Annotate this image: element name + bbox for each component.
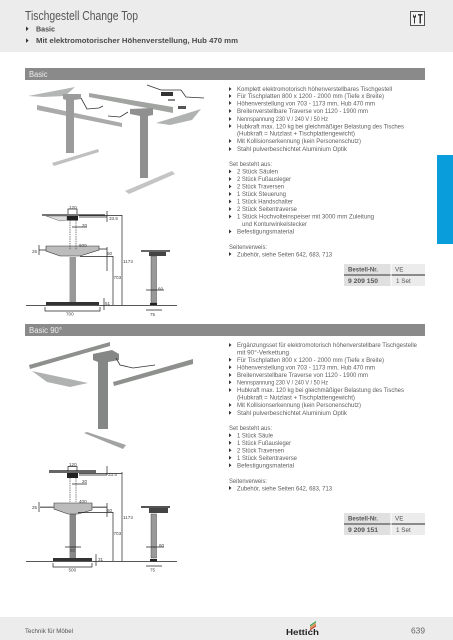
text block: Basic 90° set contents: 1 Stück Säule: [237, 432, 274, 440]
section bar: Basic: Basic: [29, 70, 48, 79]
logo: Hettich: [286, 621, 319, 637]
text block: Basic 90° features: [229, 342, 418, 417]
text block: Basic features: Breitenverstellbare Traverse von 1120 - 1900 mm: [237, 108, 368, 115]
text block: Basic features: Komplett elektromotorisch höhenverstellbares Tischgestell: [237, 86, 392, 93]
order table: Basic 90°: [344, 513, 425, 535]
technical drawing: Basic: 600: [79, 243, 87, 248]
side tab: [437, 155, 453, 244]
footer band: [0, 617, 453, 640]
text block: Basic 90° features: Für Tischplatten 800 x 1200 - 2000 mm (Tiefe x Breite): [237, 357, 384, 364]
section bar: Basic 90°: [25, 324, 425, 336]
text block: Basic 90° features: Höhenverstellung von 703 - 1173 mm, Hub 470 mm: [237, 364, 375, 372]
technical drawing: Basic 90°: 500: [68, 568, 77, 572]
text block: Basic features: Nennspannung 230 V / 240 V / 50 Hz: [237, 116, 328, 123]
technical drawing: Basic: 25: [32, 249, 38, 254]
technical drawing: Basic 90°: 75: [150, 568, 156, 572]
order table: Basic 90°: 9 209 151: [348, 527, 379, 534]
technical drawing: Basic 90°: 120: [69, 462, 77, 467]
text block: Basic set contents: 2 Stück Fußausleger: [237, 176, 291, 183]
page number: 639: [411, 626, 426, 636]
technical drawing: Basic 90°: 33.5: [108, 472, 117, 477]
text block: Basic features: (Hubkraft = Nutzlast + Tischplattengewicht): [237, 130, 355, 138]
text block: Basic 90° set contents: Befestigungsmaterial: [237, 462, 294, 470]
technical drawing: Basic 90°: 1173: [123, 515, 133, 520]
technical drawing: Basic: 20: [82, 223, 88, 228]
order table: Basic 90°: 1 Set: [396, 527, 411, 534]
technical drawing: Basic: 60: [158, 286, 164, 292]
technical drawing: Basic 90°: 400: [79, 499, 87, 504]
text block: Basic 90° cross reference: [229, 478, 333, 492]
text block: Basic 90° cross reference: Seitenverweis:: [229, 478, 267, 485]
text block: Basic set contents: 1 Stück Hochvolteinspeiser mit 3000 mm Zuleitung: [237, 214, 375, 220]
logo: Hettich: Hettich: [286, 628, 319, 637]
order table: Basic: VE: [395, 266, 403, 274]
technical drawing: Basic 90°: 50: [107, 508, 113, 513]
text block: Basic 90° features: Stahl pulverbeschichtet Aluminium Optik: [237, 410, 348, 417]
text block: Basic cross reference: Seitenverweis:: [229, 244, 267, 251]
text block: Basic 90° features: Nennspannung 230 V / 240 V / 50 Hz: [237, 380, 328, 386]
text block: Basic features: Höhenverstellung von 703 - 1173 mm, Hub 470 mm: [237, 100, 375, 108]
text block: Basic 90° set contents: 1 Stück Seitentraverse: [237, 455, 298, 462]
text block: Basic set contents: 2 Stück Seitentraverse: [237, 206, 298, 213]
technical drawing: Basic: 703: [114, 275, 122, 280]
order table: Basic 90°: VE: [395, 516, 403, 522]
section bar: Basic: [25, 68, 425, 80]
text block: Basic 90° features: Ergänzungsset für elektromotorisch höhenverstellbare Tischgestelle: [237, 342, 418, 349]
text block: Basic set contents: und Konturwinkelstecker: [242, 221, 307, 228]
technical drawing: Basic: 50: [107, 251, 113, 256]
technical drawing: Basic 90°: 25: [32, 505, 38, 510]
technical drawing: Basic: 75: [150, 312, 156, 317]
text block: Basic cross reference: Zubehör, siehe Seiten 642, 683, 713: [237, 252, 333, 258]
technical drawing: Basic 90°: [26, 462, 177, 572]
title: Tischgestell Change Top: [25, 9, 138, 23]
technical drawing: Basic 90°: 703: [114, 531, 122, 536]
text block: Basic 90° set contents: [229, 425, 298, 470]
order table: Basic: [344, 264, 425, 286]
technical drawing: Basic 90°: 31: [98, 557, 104, 562]
subtitle list: [26, 26, 238, 45]
technical drawing: Basic: 1173: [123, 259, 133, 264]
order table: Basic: 1 Set: [396, 278, 411, 285]
technical drawing: Basic 90°: 60: [70, 548, 76, 553]
text block: Basic set contents: 2 Stück Traversen: [237, 184, 285, 190]
subtitle list: Basic: [36, 26, 55, 34]
text block: Basic 90° features: Mit Kollisionserkennung (kein Personenschutz): [237, 402, 361, 409]
product photo: Basic table frame: [28, 85, 204, 194]
icon: tools: [410, 12, 424, 26]
text block: Basic features: Hubkraft max. 120 kg bei gleichmäßiger Belastung des Tisches: [237, 124, 404, 130]
text block: Basic set contents: Set besteht aus:: [229, 161, 272, 168]
technical drawing: Basic: 700: [66, 312, 74, 316]
footer label: Technik für Möbel: [25, 628, 74, 635]
technical drawing: Basic: 120: [69, 205, 77, 210]
technical drawing: Basic: 51: [105, 301, 111, 306]
text block: Basic set contents: 1 Stück Steuerung: [237, 191, 287, 198]
text block: Basic features: Für Tischplatten 800 x 1200 - 2000 mm (Tiefe x Breite): [237, 93, 384, 100]
order table: Basic 90°: Bestell-Nr.: [348, 516, 378, 522]
text block: Basic 90° features: Hubkraft max. 120 kg bei gleichmäßiger Belastung des Tisches: [237, 387, 404, 394]
text block: Basic set contents: Befestigungsmaterial: [237, 228, 294, 236]
text block: Basic set contents: [229, 161, 375, 236]
order table: Basic: 9 209 150: [348, 278, 379, 285]
text block: Basic 90° set contents: Set besteht aus:: [229, 425, 272, 432]
subtitle list: Mit elektromotorischer Höhenverstellung, Hub 470 mm: [36, 38, 238, 45]
text block: Basic 90° features: mit 90°-Verkettung: [237, 350, 290, 356]
text block: Basic features: Stahl pulverbeschichtet Aluminium Optik: [237, 146, 348, 153]
text block: Basic 90° set contents: 1 Stück Fußausleger: [237, 440, 291, 447]
technical drawing: Basic: [26, 205, 177, 317]
text block: Basic features: [229, 86, 404, 153]
technical drawing: Basic 90°: 60: [159, 543, 165, 548]
section bar: Basic 90°: Basic 90°: [29, 326, 62, 335]
text block: Basic set contents: 2 Stück Säulen: [237, 168, 279, 176]
header band: [0, 0, 453, 52]
order table: Basic: Bestell-Nr.: [348, 266, 378, 274]
product photo: Basic 90° table frame: [29, 342, 193, 449]
text block: Basic set contents: 1 Stück Handschalter: [237, 198, 293, 206]
technical drawing: Basic: 33.5: [109, 216, 118, 221]
text block: Basic 90° features: (Hubkraft = Nutzlast + Tischplattengewicht): [237, 394, 355, 402]
technical drawing: Basic 90°: 20: [82, 479, 88, 484]
text block: Basic 90° features: Breitenverstellbare Traverse von 1120 - 1900 mm: [237, 372, 368, 379]
text block: Basic 90° cross reference: Zubehör, siehe Seiten 642, 683, 713: [237, 486, 333, 492]
text block: Basic cross reference: [229, 244, 333, 258]
text block: Basic features: Mit Kollisionserkennung (kein Personenschutz): [237, 138, 361, 145]
text block: Basic 90° set contents: 2 Stück Traversen: [237, 448, 285, 454]
